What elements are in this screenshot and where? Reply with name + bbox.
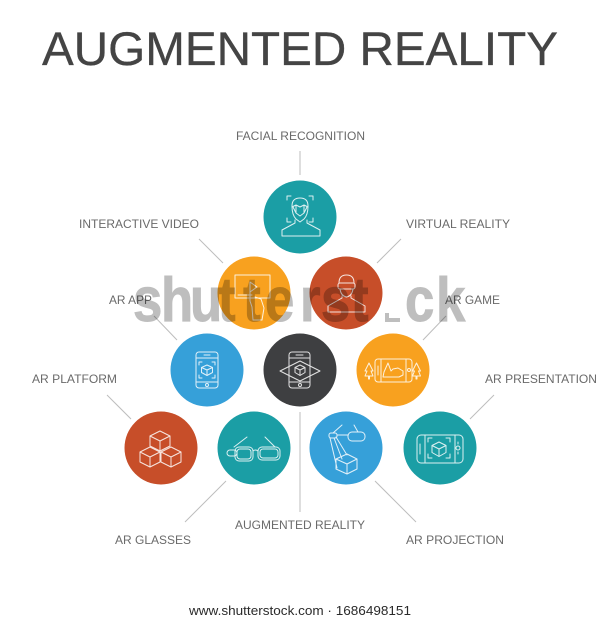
label: virtual reality: VIRTUAL REALITY: [406, 219, 510, 231]
icon: glasses projecting cube: [329, 425, 365, 474]
circle: ar glasses: [218, 412, 290, 484]
label: ar glasses: [115, 481, 226, 547]
label: ar app: AR APP: [109, 295, 152, 307]
label: interactive video: [79, 219, 223, 263]
icon: game console with trees: [365, 359, 420, 382]
label: ar app: [109, 295, 177, 340]
label: facial recognition: FACIAL RECOGNITION: [236, 131, 365, 143]
circle: augmented reality centre: [264, 334, 336, 406]
label: ar game: [423, 295, 500, 340]
label: augmented reality: AUGMENTED REALITY: [235, 520, 365, 532]
circle: ar projection: [310, 412, 382, 484]
label: augmented reality: [235, 412, 365, 532]
icon: stacked cubes: [140, 431, 181, 467]
circle: ar presentation: [404, 412, 476, 484]
icon: phone with projection: [280, 352, 320, 388]
label: ar glasses: AR GLASSES: [115, 535, 191, 547]
icon: face scan: [282, 196, 320, 236]
icon: vr headset person: [328, 275, 365, 312]
circle: virtual reality: [310, 256, 382, 330]
title: AUGMENTED REALITY: [42, 22, 558, 75]
icon: phone landscape with cube: [417, 435, 463, 463]
label: ar platform: AR PLATFORM: [32, 374, 117, 386]
label: ar presentation: [470, 374, 597, 419]
label: facial recognition: [236, 131, 365, 175]
label: ar presentation: AR PRESENTATION: [485, 374, 597, 386]
label: virtual reality: [377, 219, 510, 263]
circle: ar platform: [124, 412, 198, 484]
label: ar game: AR GAME: [445, 295, 500, 307]
watermark: shutterstck: [133, 266, 466, 335]
label: interactive video: INTERACTIVE VIDEO: [79, 219, 199, 231]
icon: smart glasses: [227, 437, 280, 461]
label: ar projection: [375, 481, 504, 547]
icon: video panel: [235, 275, 270, 320]
circle: ar game: [356, 334, 430, 406]
circle: ar app: [170, 334, 244, 406]
circle: interactive video: [218, 256, 290, 330]
label: ar platform: [32, 374, 131, 419]
icon: phone with cube: [196, 352, 218, 388]
circle: facial recognition: [264, 180, 336, 254]
label: ar projection: AR PROJECTION: [406, 535, 504, 547]
footer stock id: www.shutterstock.com · 1686498151: [188, 603, 411, 618]
